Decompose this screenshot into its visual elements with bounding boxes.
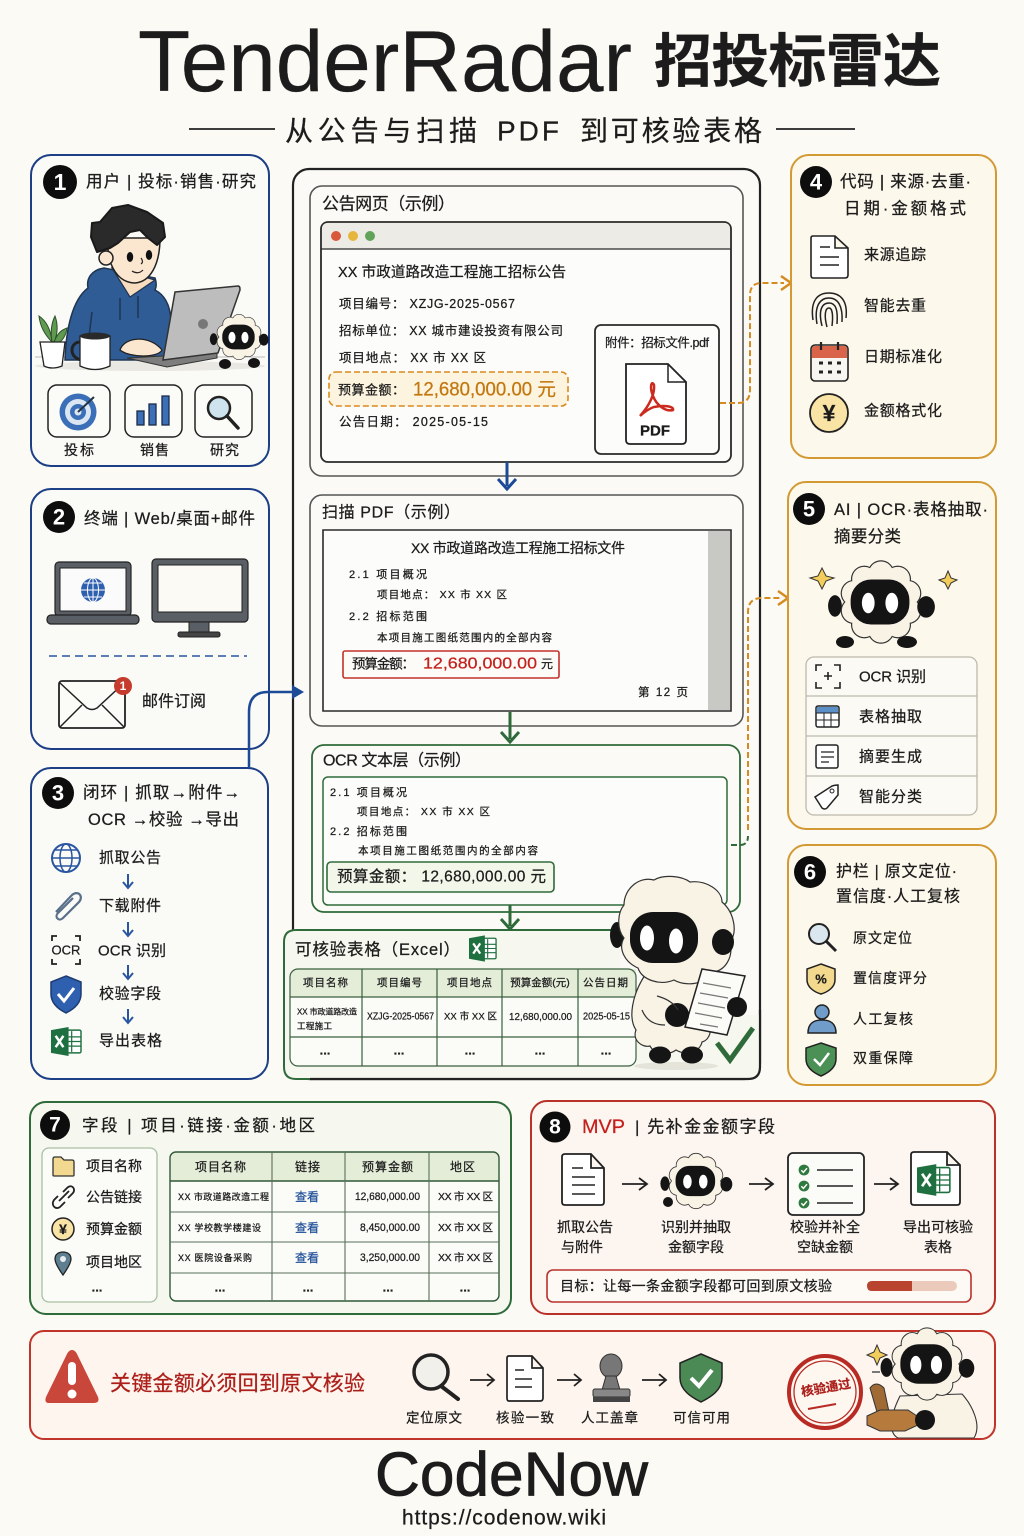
fields table: XX 市 XX 区 xyxy=(438,1251,493,1264)
step: stamp xyxy=(581,1354,638,1426)
step: recognise: 金额字段 xyxy=(668,1239,724,1255)
item: human review xyxy=(808,1005,913,1033)
tile: sales xyxy=(125,385,182,458)
green amount box xyxy=(327,862,554,892)
arrow xyxy=(622,1178,647,1190)
field list xyxy=(42,1148,157,1302)
panel 7: fields xyxy=(30,1102,511,1314)
fields table: 3,250,000.00 xyxy=(360,1252,420,1264)
item: project name: 项目名称 xyxy=(86,1158,142,1174)
number badge 5: 5 xyxy=(803,496,815,522)
label: mail subscription: 邮件订阅 xyxy=(142,692,206,710)
table: XX 市政道路改造 xyxy=(297,1006,357,1016)
subtitle xyxy=(189,116,855,146)
item: budget: 预算金额 xyxy=(86,1221,142,1237)
highlighted amount xyxy=(329,372,568,406)
fields table: XX 市政道路改造工程 xyxy=(178,1191,269,1202)
step: verify: 核验一致 xyxy=(496,1410,554,1426)
table: 公告日期 xyxy=(583,976,629,989)
fields table: 链接 xyxy=(295,1159,321,1174)
subtitle: 到可核验表格 xyxy=(580,116,762,146)
item: link: 公告链接 xyxy=(86,1189,142,1205)
icon: sparkles xyxy=(810,568,957,589)
number badge 6 xyxy=(794,856,826,888)
fields table: XX 学校教学楼建设 xyxy=(178,1222,261,1233)
number badge 4 xyxy=(800,166,832,198)
icon: mail xyxy=(59,677,132,728)
connector: ocr to ai panel xyxy=(731,591,788,845)
number badge 6: 6 xyxy=(804,860,816,884)
scanned page: 第 12 页 xyxy=(638,685,688,699)
item: date xyxy=(811,342,942,381)
text sheet: 本项目施工图纸范围内的全部内容 xyxy=(358,844,538,857)
heading: 扫描 PDF（示例） xyxy=(322,504,460,522)
fields table: 预算金额 xyxy=(362,1159,414,1174)
step: fetch xyxy=(557,1154,613,1255)
browser window xyxy=(321,222,731,462)
heading 5: AI | OCR·表格抽取· xyxy=(834,500,988,519)
arrow xyxy=(123,874,133,888)
number badge 2 xyxy=(43,501,75,533)
subtitle: PDF xyxy=(497,116,559,146)
title xyxy=(138,14,941,110)
fields table: XX 市 XX 区 xyxy=(438,1221,493,1234)
number badge 3: 3 xyxy=(52,780,64,806)
fields table: ... xyxy=(215,1280,225,1294)
arrow xyxy=(642,1374,666,1386)
number badge 2: 2 xyxy=(53,504,65,530)
scanned page: 2.1 项目概况 xyxy=(349,568,427,581)
highlighted amount: 预算金额： xyxy=(338,382,405,398)
number badge 8: 8 xyxy=(549,1116,561,1138)
icon: pdf: PDF xyxy=(640,422,670,440)
icon: excel xyxy=(469,935,496,962)
title: TenderRadar xyxy=(138,14,632,110)
mascot: sheep with stamp xyxy=(867,1328,977,1438)
warning text: 关键金额必须回到原文核验 xyxy=(110,1372,365,1396)
heading 8: | 先补金金额字段 xyxy=(635,1118,775,1136)
table: ... xyxy=(320,1042,330,1058)
red amount box xyxy=(343,651,559,678)
fields table: ... xyxy=(303,1280,313,1294)
arrow xyxy=(123,1009,133,1023)
fields table xyxy=(170,1152,499,1301)
red amount box: 预算金额： xyxy=(352,656,415,672)
step: validate: 校验字段 xyxy=(99,986,161,1002)
scanned page: 本项目施工图纸范围内的全部内容 xyxy=(377,631,552,644)
arrow xyxy=(557,1374,581,1386)
subtitle: 从公告与扫描 xyxy=(285,116,477,146)
item: human review: 人工复核 xyxy=(853,1011,913,1027)
arrow: scan to ocr xyxy=(501,712,519,742)
fields table: 12,680,000.00 xyxy=(355,1191,420,1203)
heading 5: 摘要分类 xyxy=(834,527,901,546)
mini sheep xyxy=(210,314,269,369)
panel: scanned pdf xyxy=(310,495,743,726)
item: region xyxy=(55,1252,142,1275)
panel 3: loop xyxy=(31,768,268,1079)
text sheet: 项目地点： XX 市 XX 区 xyxy=(357,805,490,818)
mascot: sheep with paper xyxy=(610,876,747,1070)
heading 3 xyxy=(83,783,240,829)
arrow xyxy=(123,965,133,979)
item: confidence xyxy=(807,964,927,994)
scanned page xyxy=(323,530,731,711)
text sheet xyxy=(323,777,727,905)
fields table: 8,450,000.00 xyxy=(360,1222,420,1234)
heading 4: 日期·金额格式 xyxy=(844,199,966,218)
item: currency: ¥ xyxy=(823,400,836,426)
heading 6 xyxy=(836,862,960,906)
heading 4: 代码 | 来源·去重· xyxy=(840,172,971,191)
item: link xyxy=(53,1186,142,1208)
step: ocr xyxy=(52,936,166,964)
row: table: 表格抽取 xyxy=(859,708,922,726)
row: table xyxy=(816,706,922,727)
number badge 5 xyxy=(793,493,825,525)
green amount box: 预算金额： 12,680,000.00 元 xyxy=(337,866,546,886)
item: source tracking xyxy=(811,236,926,278)
step: fetch: 抓取公告 xyxy=(99,850,161,866)
step: locate xyxy=(406,1355,462,1426)
arrow xyxy=(123,922,133,936)
step: fetch: 抓取公告 xyxy=(557,1219,613,1235)
step: trusted xyxy=(673,1354,730,1426)
browser window: 招标单位： XX 城市建设投资有限公司 xyxy=(339,323,563,338)
goal bar: 目标：让每一条金额字段都可回到原文核验 xyxy=(560,1278,832,1294)
table xyxy=(290,969,636,1066)
heading 1: 用户 | 投标·销售·研究 xyxy=(86,172,256,191)
scanned page: XX 市政道路改造工程施工招标文件 xyxy=(411,540,625,556)
tile: sales: 销售 xyxy=(140,442,169,458)
fields table: 项目名称 xyxy=(195,1159,247,1174)
icon: warning xyxy=(45,1350,98,1403)
table: ... xyxy=(535,1042,545,1058)
panel: key warning xyxy=(30,1328,995,1439)
goal bar xyxy=(547,1270,971,1302)
footer logo: https://codenow.wiki xyxy=(402,1506,606,1530)
number badge 8 xyxy=(540,1112,570,1142)
arrow head xyxy=(292,685,304,699)
mascot: ai sheep xyxy=(828,561,935,648)
step: check xyxy=(788,1153,864,1255)
step: fetch: 与附件 xyxy=(561,1239,603,1255)
text sheet: 2.2 招标范围 xyxy=(330,824,407,838)
row: ocr: OCR 识别 xyxy=(859,668,926,686)
title: 招投标雷达 xyxy=(654,30,941,94)
step: export xyxy=(51,1027,162,1056)
arrow: ocr to table xyxy=(501,905,519,929)
step: validate xyxy=(51,976,161,1013)
panel: verifiable table xyxy=(284,930,760,1079)
step: export: 表格 xyxy=(924,1239,952,1255)
number badge 3 xyxy=(42,777,74,809)
heading 4 xyxy=(840,172,971,218)
arrow: announcement to scan xyxy=(498,462,516,489)
heading 3: OCR →校验 →导出 xyxy=(88,810,239,829)
heading 5 xyxy=(834,500,988,546)
item: dedupe xyxy=(812,293,926,327)
table: 工程施工 xyxy=(297,1021,332,1031)
center frame xyxy=(293,169,760,1079)
row: summary xyxy=(816,745,922,768)
table: 项目编号 xyxy=(377,976,423,989)
step: attachment: 下载附件 xyxy=(99,898,161,914)
number badge 1: 1 xyxy=(54,169,67,195)
table: 项目地点 xyxy=(447,976,493,989)
fields table: ... xyxy=(460,1280,470,1294)
heading 6: 护栏 | 原文定位· xyxy=(836,862,957,880)
table: 12,680,000.00 xyxy=(509,1011,572,1023)
row: classify xyxy=(815,785,922,809)
item: date: 日期标准化 xyxy=(864,348,942,366)
item: confidence: 置信度评分 xyxy=(853,970,927,986)
step: ocr: OCR 识别 xyxy=(98,942,166,960)
fields table: 查看 xyxy=(295,1190,319,1204)
arrow xyxy=(874,1178,898,1190)
row: ocr xyxy=(816,665,926,688)
attachment card xyxy=(595,325,719,454)
step: trusted: 可信可用 xyxy=(673,1410,730,1426)
fields table: 查看 xyxy=(295,1251,319,1265)
heading: 公告网页（示例） xyxy=(322,194,455,214)
seal: verified: 核验通过 xyxy=(800,1376,852,1399)
row: classify: 智能分类 xyxy=(859,788,922,806)
browser window: 公告日期： 2025-05-15 xyxy=(339,415,488,429)
item: dedupe: 智能去重 xyxy=(864,296,926,314)
fields table: XX 市 XX 区 xyxy=(438,1190,493,1203)
step: export: 导出可核验 xyxy=(903,1219,973,1235)
item: budget: ¥ xyxy=(59,1221,67,1237)
item: currency xyxy=(810,394,942,432)
number badge 7: 7 xyxy=(49,1114,61,1136)
item: region: 项目地区 xyxy=(86,1254,142,1270)
tile: tender: 投标 xyxy=(64,442,94,458)
heading 3: 闭环 | 抓取→附件→ xyxy=(83,783,240,802)
step: verify xyxy=(496,1356,554,1426)
illustration: user at laptop xyxy=(35,205,269,371)
fields table: XX 医院设备采购 xyxy=(178,1252,252,1263)
table: 2025-05-15 xyxy=(583,1012,630,1022)
item: double guard: 双重保障 xyxy=(853,1050,913,1066)
icon: monitor xyxy=(152,559,248,637)
step: locate: 定位原文 xyxy=(406,1410,462,1426)
panel: announcement page xyxy=(310,186,743,476)
arrow: loop into center xyxy=(249,692,294,768)
panel 4: code xyxy=(791,155,996,458)
panel 2: terminals xyxy=(31,489,269,749)
heading 7: 字段 | 项目·链接·金额·地区 xyxy=(82,1116,315,1135)
number badge 7 xyxy=(40,1110,70,1140)
table: ... xyxy=(465,1042,475,1058)
panel: ocr text layer xyxy=(312,745,740,912)
tile: research xyxy=(195,385,252,458)
fields table: 查看 xyxy=(295,1221,319,1235)
step: recognise: 识别并抽取 xyxy=(661,1219,731,1235)
number badge 4: 4 xyxy=(810,170,823,194)
panel 5: ai xyxy=(788,482,996,829)
item: locate xyxy=(809,924,912,951)
browser window: 项目编号： XZJG-2025-0567 xyxy=(339,296,515,311)
icon: laptop xyxy=(47,562,139,624)
panel 6: guardrails xyxy=(788,845,996,1085)
table: XZJG-2025-0567 xyxy=(367,1012,434,1022)
heading 8: MVP xyxy=(582,1116,625,1138)
row: summary: 摘要生成 xyxy=(859,748,922,766)
scanned page: 项目地点： XX 市 XX 区 xyxy=(377,588,507,601)
icon: mail: 1 xyxy=(120,679,127,693)
panel 8: mvp xyxy=(531,1101,995,1314)
text sheet: 2.1 项目概况 xyxy=(330,786,407,799)
red amount box: 12,680,000.00 xyxy=(423,656,537,672)
seal: verified xyxy=(789,1356,861,1428)
item: locate: 原文定位 xyxy=(853,930,912,946)
step: export xyxy=(903,1152,973,1255)
browser window: 项目地点： XX 市 XX 区 xyxy=(339,350,486,365)
browser window: XX 市政道路改造工程施工招标公告 xyxy=(338,264,566,281)
step: attachment xyxy=(56,893,161,919)
heading 6: 置信度·人工复核 xyxy=(836,888,960,906)
table: 项目名称 xyxy=(303,976,349,989)
icon: green check xyxy=(717,1028,753,1060)
item: double guard xyxy=(806,1043,913,1076)
step: check: 空缺金额 xyxy=(797,1239,853,1255)
step: export: 导出表格 xyxy=(99,1032,162,1050)
item: project name xyxy=(53,1157,142,1176)
step: fetch xyxy=(52,844,161,872)
fields table: 地区 xyxy=(450,1160,476,1174)
panel 1: users xyxy=(31,155,269,466)
table: 预算金额(元) xyxy=(510,976,570,989)
heading 2: 终端 | Web/桌面+邮件 xyxy=(84,509,255,528)
scanned page: 2.2 招标范围 xyxy=(349,609,427,623)
table: ... xyxy=(394,1042,404,1058)
item: source tracking: 来源追踪 xyxy=(864,246,926,264)
table: ... xyxy=(601,1042,611,1058)
arrow xyxy=(470,1374,494,1386)
heading: OCR 文本层（示例） xyxy=(323,752,471,770)
connector: attachment to code panel xyxy=(720,283,784,403)
item: confidence: % xyxy=(815,972,827,986)
table: XX 市 XX 区 xyxy=(444,1010,497,1022)
tile: tender xyxy=(48,385,110,458)
step: recognise xyxy=(660,1153,732,1255)
heading 8 xyxy=(582,1116,775,1138)
heading: 可核验表格（Excel） xyxy=(295,940,460,959)
item: budget xyxy=(52,1218,142,1240)
field list: ... xyxy=(92,1280,102,1294)
tile: research: 研究 xyxy=(210,442,239,458)
step: ocr: OCR xyxy=(52,942,80,958)
feature list xyxy=(806,657,977,815)
footer logo: CodeNow xyxy=(375,1440,648,1510)
step: stamp: 人工盖章 xyxy=(581,1410,638,1426)
item: currency: 金额格式化 xyxy=(864,402,942,420)
arrow head xyxy=(781,276,791,290)
number badge 1 xyxy=(43,165,77,199)
step: check: 校验并补全 xyxy=(790,1219,860,1235)
fields table: ... xyxy=(383,1280,393,1294)
highlighted amount: 12,680,000.00 元 xyxy=(413,380,556,400)
red amount box: 元 xyxy=(541,657,553,671)
arrow xyxy=(749,1178,773,1190)
attachment card: 附件：招标文件.pdf xyxy=(605,335,710,350)
